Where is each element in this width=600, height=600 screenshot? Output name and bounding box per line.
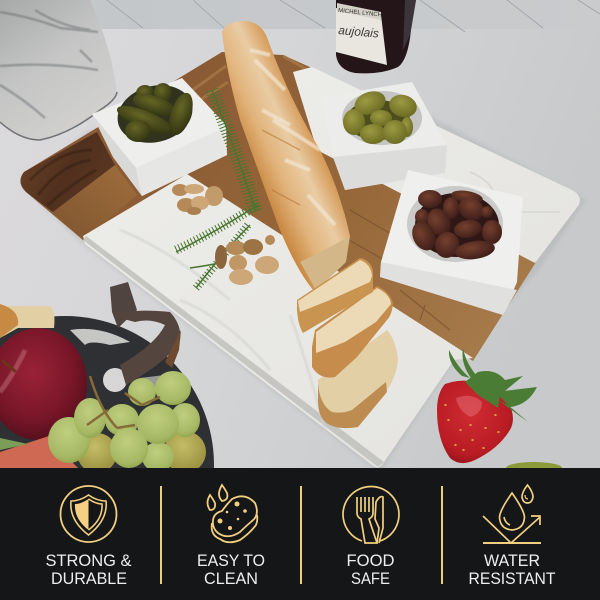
- walnuts: [172, 184, 279, 285]
- slice 3: [318, 330, 398, 428]
- dark marble plate: [0, 316, 214, 600]
- table surface: [0, 0, 600, 468]
- label: strong and durable: DURABLE: [51, 570, 127, 588]
- toast on plate: [0, 304, 54, 338]
- feature: food safe: [343, 486, 399, 588]
- icon: shield: [60, 486, 116, 542]
- feature band: [0, 468, 600, 600]
- lime at bottom edge: [506, 462, 562, 474]
- dark wood end: [20, 132, 115, 212]
- slice 1: [297, 258, 373, 333]
- wine bottle: [336, 0, 416, 73]
- apple: [0, 328, 87, 440]
- pickle bowl: [92, 77, 227, 196]
- dividers: [160, 486, 443, 584]
- label: easy to clean: EASY TO: [197, 552, 265, 570]
- band background: [0, 468, 600, 600]
- green olive bowl: [322, 82, 447, 190]
- feature: easy to clean: [197, 485, 265, 588]
- bottle label: [336, 3, 387, 65]
- slice 2: [312, 286, 393, 378]
- label: water resistant: WATER: [484, 552, 540, 570]
- leather strap: [110, 282, 181, 385]
- bread slices: [297, 258, 398, 428]
- baguette: [222, 21, 350, 291]
- label: easy to clean: CLEAN: [204, 570, 258, 588]
- grape bunch: [48, 371, 206, 473]
- bottle label: MICHEL LYNCH: [338, 8, 382, 19]
- feature: water resistant: [468, 485, 556, 588]
- feature: strong and durable: [46, 486, 132, 588]
- label: food safe: FOOD: [346, 552, 395, 570]
- icon: fork and knife: [343, 486, 399, 543]
- pickles: [114, 83, 197, 142]
- label: water resistant: RESISTANT: [468, 570, 556, 588]
- kalamata olive bowl: [380, 170, 523, 315]
- green olives: [343, 87, 419, 144]
- rosemary sprig: [176, 90, 258, 288]
- wood section: [20, 52, 536, 361]
- marble vase: [0, 0, 117, 140]
- background wall planks: [0, 0, 600, 32]
- baguette cut end: [300, 236, 350, 291]
- label: strong and durable: STRONG &: [46, 552, 132, 570]
- soft board shadow: [22, 100, 586, 473]
- icon: water drop and arrow: [483, 485, 541, 543]
- lighter wood stripe: [53, 165, 137, 240]
- cutting board: [20, 52, 580, 468]
- icon: sponge with drops: [208, 485, 257, 542]
- bottle label: aujolais: [338, 23, 380, 41]
- label: food safe: SAFE: [351, 570, 390, 588]
- strawberry: [437, 348, 537, 463]
- marble main slab: [83, 174, 473, 468]
- dark olives: [408, 188, 502, 262]
- marble upper strip: [293, 67, 580, 263]
- strawberry leaves: [449, 348, 537, 422]
- salmon slice: [0, 435, 78, 468]
